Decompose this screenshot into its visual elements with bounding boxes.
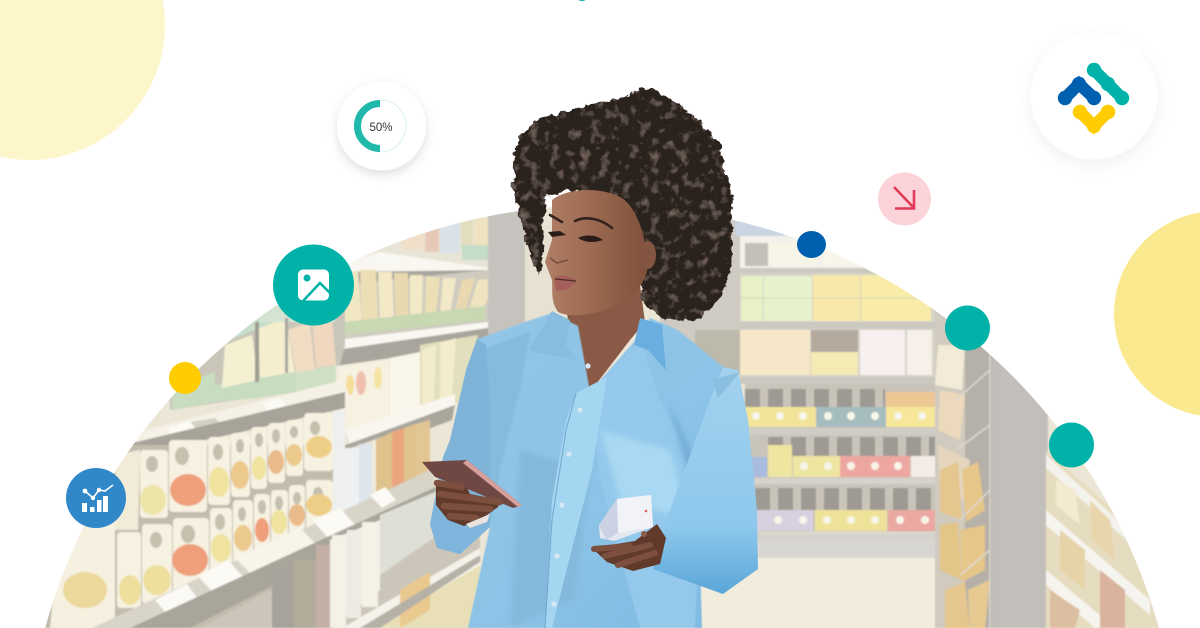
percentage label: 50% — [369, 122, 393, 134]
shirt body — [468, 313, 752, 628]
left shelving: white boxes and bags — [336, 334, 478, 448]
shirt buttons — [585, 363, 591, 369]
right sleeve — [653, 367, 758, 594]
panel: faded supermarket aisle photo in a dome — [0, 200, 1200, 628]
nose shadow — [550, 258, 568, 263]
phone — [422, 460, 522, 508]
button placket — [545, 377, 607, 628]
left shelving: upper section — [340, 216, 489, 366]
left shelving: soup cans — [40, 410, 345, 628]
ring: filled half — [358, 104, 380, 148]
teal dot — [1049, 422, 1094, 468]
dark column behind the woman — [488, 205, 785, 405]
hair — [514, 88, 734, 321]
progress badge: 50% — [337, 82, 426, 170]
brand logo badge — [1030, 32, 1158, 160]
neck — [566, 285, 645, 392]
teal dot — [945, 306, 990, 350]
logo: blue chevron — [1058, 77, 1101, 105]
left hand — [436, 482, 500, 528]
right hand — [592, 524, 666, 571]
aisle floor — [695, 558, 945, 628]
background circle: right yellow — [1114, 211, 1200, 417]
centre shelves: top band — [740, 236, 940, 323]
logo: yellow chevron — [1073, 105, 1115, 133]
ear — [640, 241, 656, 269]
eyebrows — [550, 215, 612, 228]
centre shelves: bottle row 1 — [745, 384, 936, 435]
dark pillar — [992, 340, 1048, 628]
left shelving: mid-shelf strip — [132, 382, 350, 446]
woman holding phone and box — [422, 88, 758, 628]
icon: analytics chart in blue circle — [66, 468, 126, 528]
logo: teal chain — [1087, 63, 1129, 105]
background circle: top-left yellow — [0, 0, 165, 160]
left sleeve — [430, 339, 490, 554]
collars — [529, 311, 576, 360]
small teal dot at top edge — [575, 0, 589, 1]
centre shelves: bottle row 3 — [752, 484, 938, 558]
left shelving: lower strip and boxes — [92, 420, 480, 628]
eyes — [548, 231, 603, 242]
yellow dot — [169, 362, 201, 394]
face — [545, 190, 656, 315]
icon: down-right arrow in pink circle — [878, 172, 931, 226]
rack of snack bags — [935, 300, 995, 628]
right shelving — [1046, 450, 1170, 628]
lips — [554, 276, 577, 291]
centre shelves: bottle row 2 — [748, 435, 937, 484]
blue dot — [797, 231, 826, 258]
held white box — [599, 495, 653, 541]
ring: unfilled half — [380, 100, 406, 152]
centre shelves: box row — [740, 322, 940, 384]
left shelving: soup boxes row — [170, 305, 345, 410]
icon: image in teal circle — [273, 244, 354, 326]
